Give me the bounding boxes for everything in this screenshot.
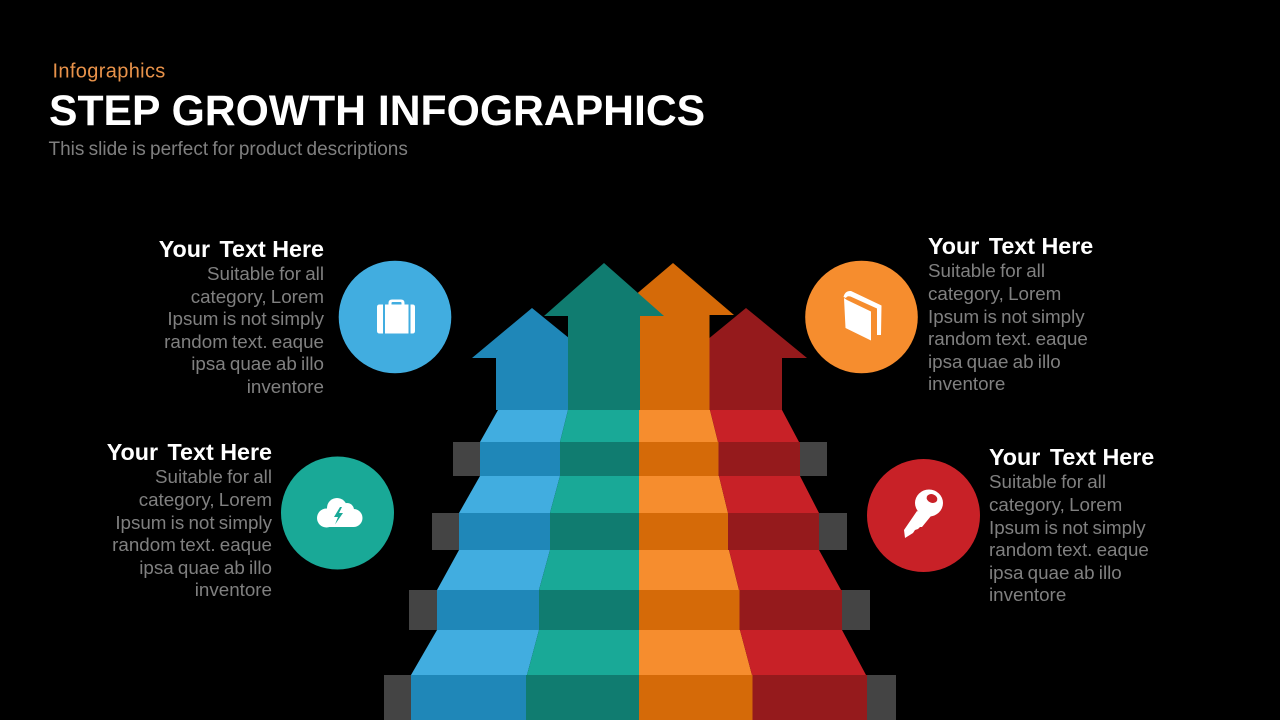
arrow: blue (472, 308, 580, 410)
icon circle: red key (867, 459, 980, 572)
text block: bottom right: random text. eaque (989, 539, 1149, 560)
text block: top left: inventore (247, 376, 324, 397)
text block: bottom right: category, Lorem (989, 494, 1122, 515)
column: blue steps (411, 410, 568, 720)
text block: bottom left: ipsa quae ab illo (139, 557, 272, 578)
text block: top right: Suitable for all (928, 260, 1045, 281)
text block: bottom left: inventore (195, 579, 272, 600)
kicker: Infographics: Infographics (52, 60, 166, 82)
text block: bottom left: Your Text Here (107, 439, 272, 465)
text block: top right: random text. eaque (928, 328, 1088, 349)
text block: top right: inventore (928, 373, 1005, 394)
arrow: teal (544, 263, 664, 410)
column: teal steps (526, 410, 639, 720)
text block: bottom right (989, 444, 1154, 605)
text block: bottom right: inventore (989, 584, 1066, 605)
stepped staircase with arrows (384, 263, 896, 720)
arrow: orange (630, 263, 734, 410)
text block: top left (159, 236, 325, 397)
text block: top left: Ipsum is not simply (167, 308, 325, 329)
text block: bottom left: Suitable for all (155, 466, 272, 487)
text block: bottom left: random text. eaque (112, 534, 272, 555)
text block: bottom right: ipsa quae ab illo (989, 562, 1122, 583)
column: orange steps (639, 410, 753, 720)
text block: top right: Ipsum is not simply (928, 306, 1085, 327)
text block: bottom right: Suitable for all (989, 471, 1106, 492)
text block: bottom left (107, 439, 273, 600)
text block: bottom right: Your Text Here (989, 444, 1154, 470)
icon circle: teal cloud with lightning (281, 456, 394, 570)
text block: top right: Your Text Here (928, 233, 1093, 259)
grey step ends (384, 442, 896, 720)
text block: top left: ipsa quae ab illo (191, 353, 324, 374)
text block: top left: category, Lorem (191, 286, 324, 307)
text block: bottom right: Ipsum is not simply (989, 517, 1146, 538)
icon circle: blue briefcase (339, 261, 451, 373)
text block: top left: Your Text Here (159, 236, 324, 262)
text block: top left: Suitable for all (207, 263, 324, 284)
icon circle: orange book (805, 261, 918, 373)
text block: top right: category, Lorem (928, 283, 1061, 304)
arrow: red (700, 308, 807, 410)
title: STEP GROWTH INFOGRAPHICS (49, 87, 705, 135)
text block: top left: random text. eaque (164, 331, 324, 352)
text block: bottom left: Ipsum is not simply (115, 512, 273, 533)
column: red steps (710, 410, 867, 720)
text block: top right (928, 233, 1093, 394)
text block: top right: ipsa quae ab illo (928, 351, 1061, 372)
text block: bottom left: category, Lorem (139, 489, 272, 510)
subtitle: This slide is perfect for product descriptions (48, 139, 408, 160)
